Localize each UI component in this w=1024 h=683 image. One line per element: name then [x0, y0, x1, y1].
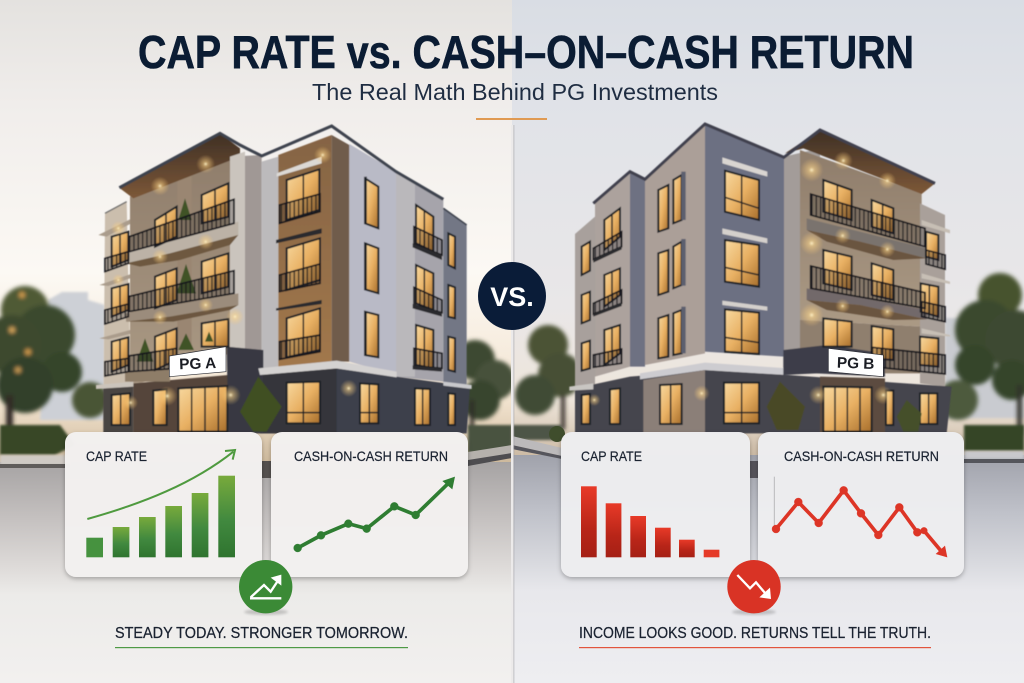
brown column windows [287, 169, 319, 220]
accent rule [476, 118, 547, 120]
tagline rule: PG A [115, 647, 408, 648]
double windows on beige face [658, 185, 668, 232]
windows recess [155, 207, 177, 247]
icon: decline badge [727, 560, 781, 615]
bar chart [86, 476, 235, 557]
main face windows [725, 171, 759, 220]
building: PG B [569, 124, 952, 433]
lights [111, 146, 357, 410]
sign: PG A: PG A [179, 355, 216, 373]
trend arrow [87, 450, 235, 519]
sign: PG A [169, 347, 226, 377]
vs badge [478, 262, 546, 330]
background: right scene [512, 0, 1024, 683]
far left windows [582, 242, 590, 275]
tagline: PG B: INCOME LOOKS GOOD. RETURNS TELL THE TRUTH. [579, 625, 931, 642]
heading: CAP RATE [86, 449, 147, 464]
line chart [294, 477, 455, 552]
heading: CASH-ON-CASH RETURN [294, 449, 448, 464]
sign: PG B: PG B [837, 355, 875, 373]
divider line [511, 125, 514, 683]
sign: PG B [828, 348, 883, 377]
building: PG A [96, 126, 472, 433]
balcony slabs [807, 218, 927, 258]
tagline: PG A: STEADY TODAY. STRONGER TOMORROW. [115, 625, 408, 642]
icon: growth badge [239, 560, 292, 615]
recess windows [823, 180, 852, 220]
rails [811, 194, 925, 247]
plants [137, 198, 213, 362]
balcony slabs [126, 222, 238, 263]
vs badge: VS. [490, 282, 534, 312]
bar chart [581, 486, 719, 557]
lights [588, 151, 896, 406]
tagline rule: PG B [579, 647, 931, 648]
line chart [772, 477, 947, 557]
background: left scene [0, 0, 515, 683]
side windows [365, 178, 378, 228]
panel: PG B cap rate [561, 432, 750, 577]
panel: PG A cap rate [65, 432, 262, 577]
panel: PG B cash-on-cash [758, 432, 964, 577]
rails [129, 199, 234, 252]
ground windows [582, 394, 590, 424]
ground floor windows [112, 393, 130, 425]
heading: CAP RATE [581, 449, 642, 464]
heading: CASH-ON-CASH RETURN [784, 449, 939, 464]
panel: PG A cash-on-cash [271, 432, 468, 577]
subtitle: The Real Math Behind PG Investments [312, 79, 718, 105]
